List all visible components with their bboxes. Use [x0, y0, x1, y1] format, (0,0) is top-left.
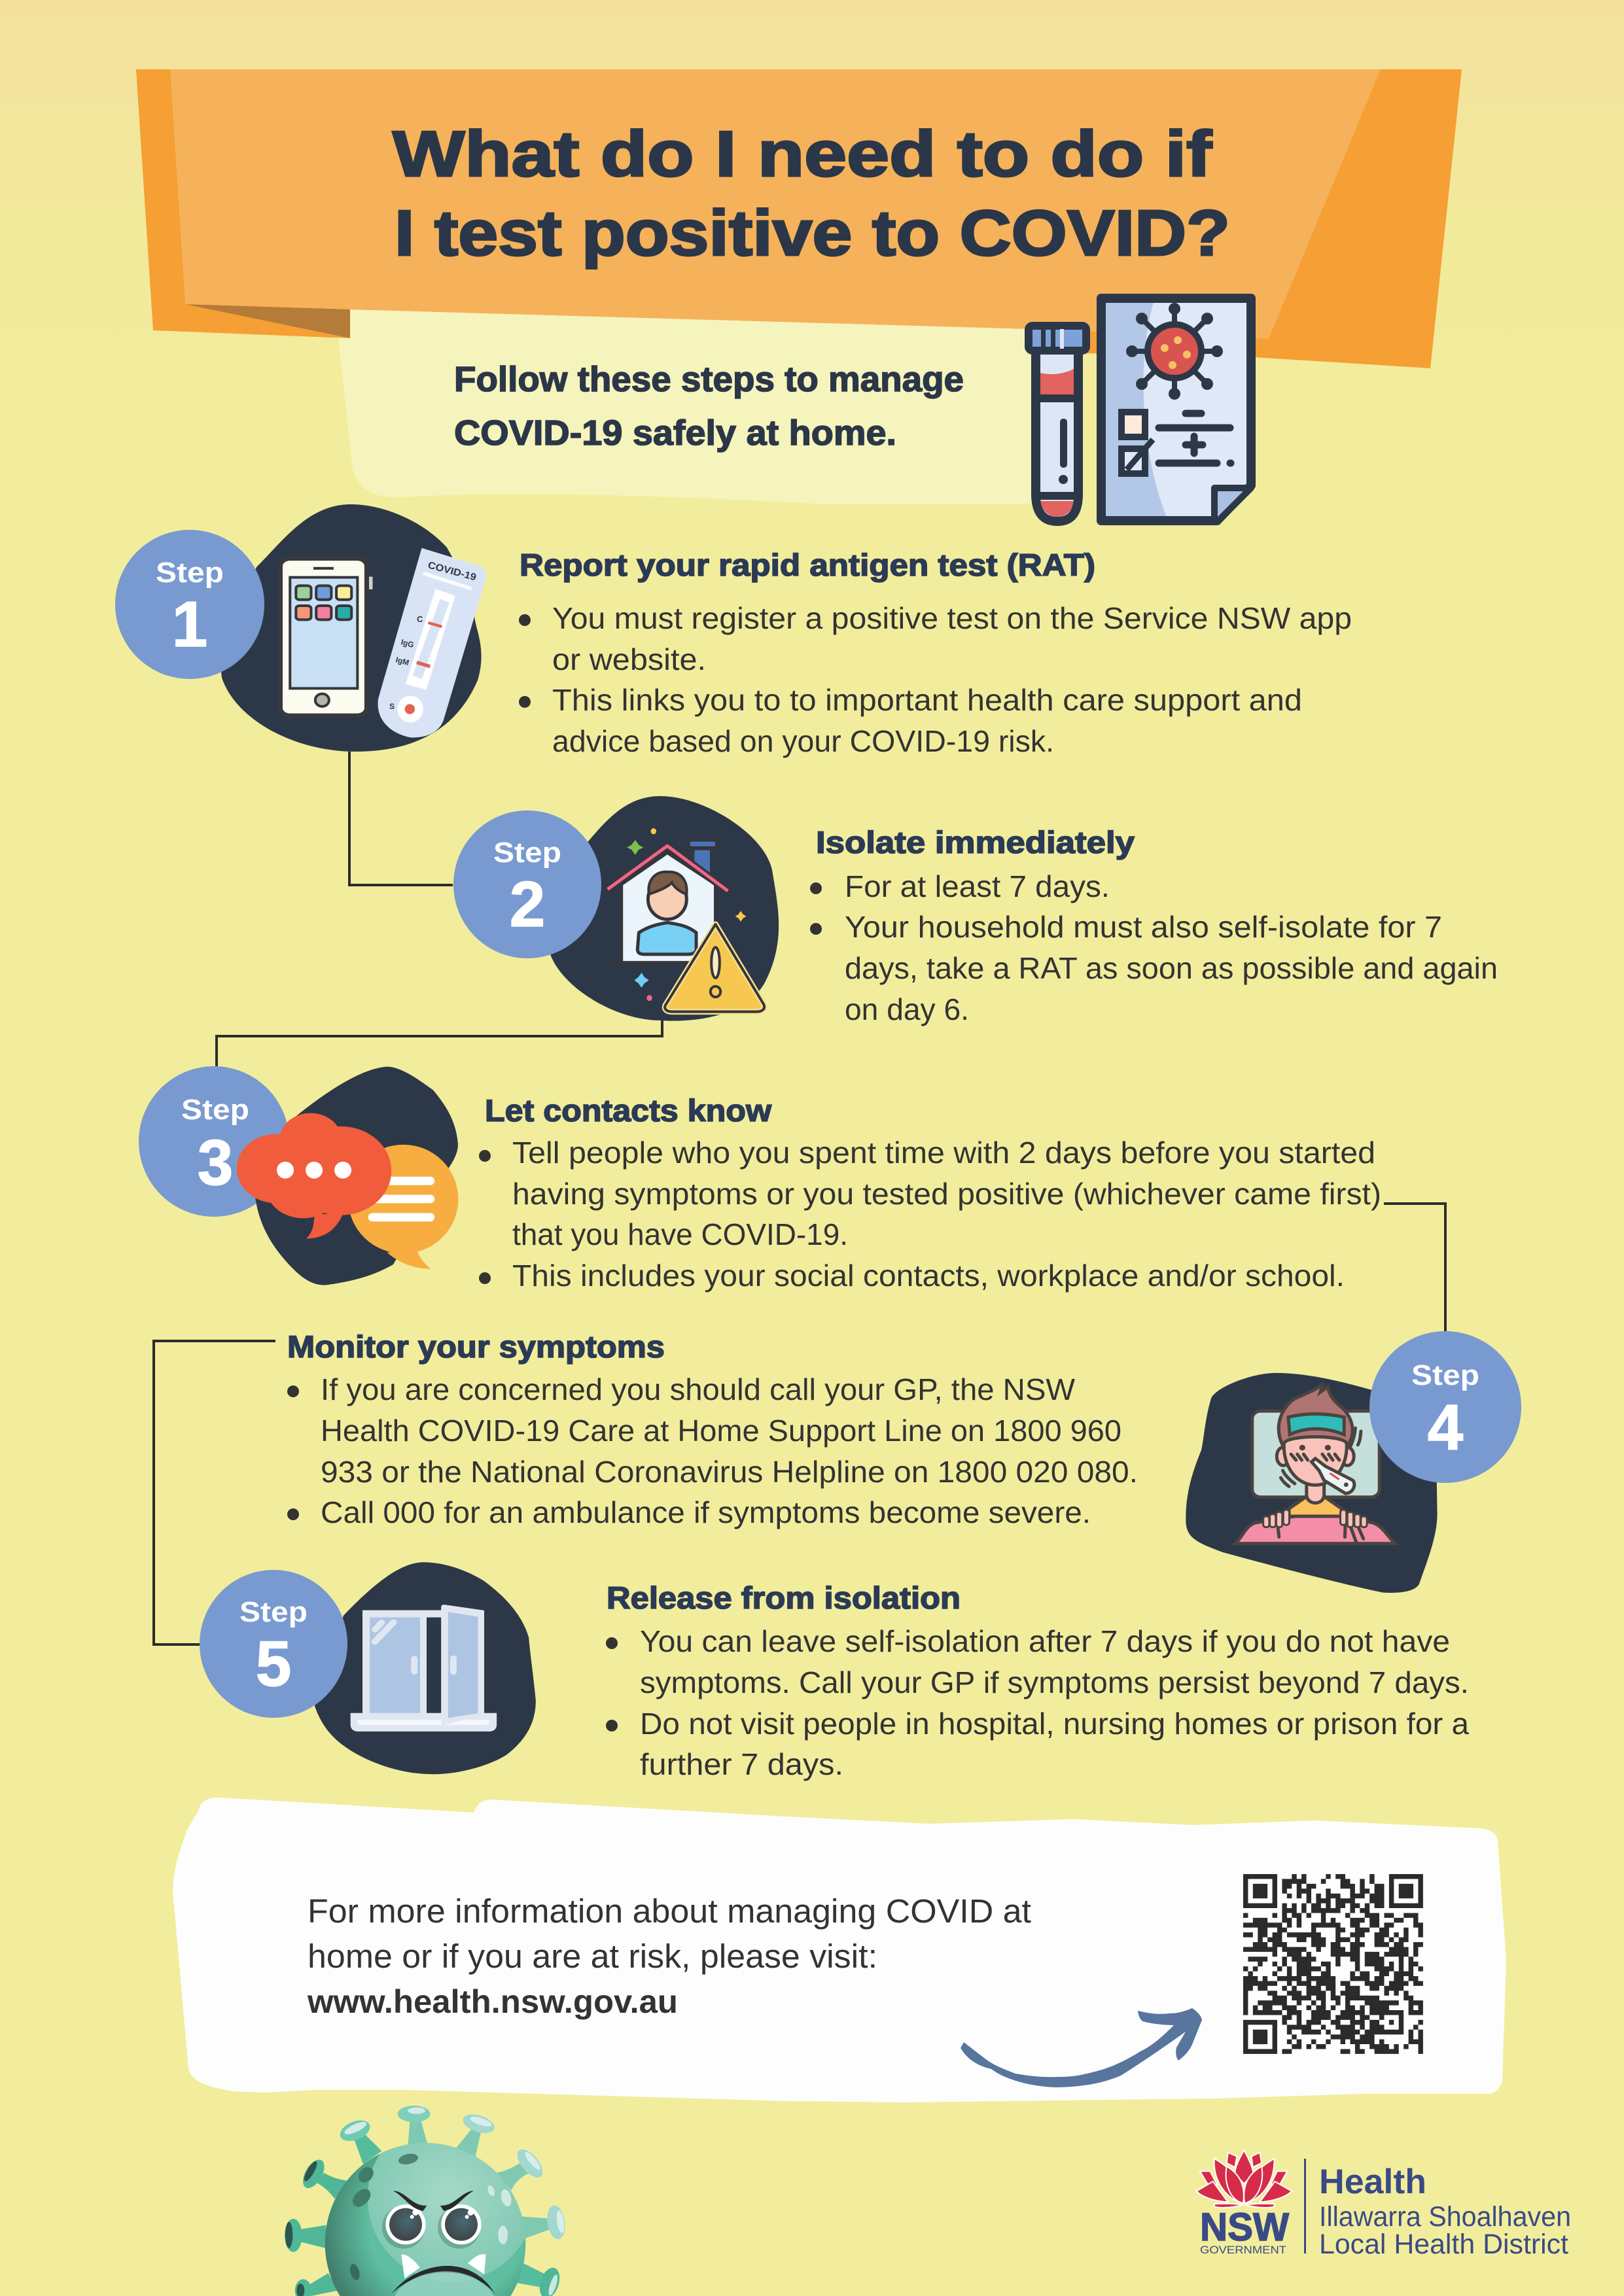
bullet list: symptoms. Call your GP if symptoms persist beyond 7 days.	[640, 1665, 1469, 1699]
panel: step 1	[115, 504, 1352, 758]
pale intro panel	[338, 309, 1073, 504]
logo: NSW Government Health Illawarra Shoalhaven Local Health District: Illawarra Shoalhaven	[1319, 2201, 1571, 2233]
panel: step 2	[453, 796, 1498, 1026]
icon: rapid antigen test cassette: COVID-19	[427, 559, 478, 583]
step badge: 5	[256, 1627, 291, 1699]
icon: test tube	[1029, 326, 1086, 521]
arrow to QR code	[961, 2008, 1202, 2087]
bullet list: on day 6.	[845, 992, 969, 1026]
step badge: 1	[172, 588, 207, 660]
connector: step 1 to step 2	[349, 752, 453, 885]
step badge: Step	[156, 557, 224, 589]
panel: step 4	[287, 1329, 1521, 1593]
panel: step 5	[200, 1562, 1469, 1781]
bullet list: You must register a positive test on the Service NSW app	[552, 601, 1352, 635]
QR code	[1243, 1877, 1423, 2051]
intro text	[454, 360, 964, 453]
bullet list	[810, 869, 1498, 1026]
step badge	[200, 1570, 347, 1718]
step badge: Step	[493, 837, 561, 869]
information text: For more information about managing COVID at	[308, 1892, 1031, 1930]
bullet list	[479, 1136, 1381, 1293]
logo: NSW Government Health Illawarra Shoalhaven Local Health District: Health	[1319, 2163, 1426, 2201]
icon: angry virus character	[285, 2106, 567, 2296]
bullet list: Call 000 for an ambulance if symptoms become severe.	[321, 1495, 1091, 1529]
connector: step 3 to step 4	[1384, 1204, 1445, 1331]
icon: phone	[279, 557, 372, 718]
step badge: 3	[198, 1126, 233, 1198]
logo: NSW Government Health Illawarra Shoalhaven Local Health District	[1196, 2150, 1571, 2260]
information text: home or if you are at risk, please visit:	[308, 1938, 877, 1975]
connector: step 2 to step 3	[217, 1019, 662, 1066]
heading: Let contacts know	[485, 1093, 771, 1128]
step badge: Step	[1411, 1359, 1479, 1391]
icon: person isolating at home	[608, 828, 764, 1012]
waratah emblem	[1196, 2150, 1292, 2208]
intro text: COVID-19 safely at home.	[454, 413, 896, 453]
icon: test report	[1101, 298, 1251, 521]
intro text: Follow these steps to manage	[454, 360, 964, 399]
heading: Report your rapid antigen test (RAT)	[520, 548, 1095, 582]
step badge: 2	[510, 868, 545, 940]
blob background	[546, 796, 779, 1021]
icon: sick person in bed	[1186, 1373, 1438, 1593]
bullet list	[606, 1624, 1469, 1781]
logo: NSW Government Health Illawarra Shoalhaven Local Health District: NSW	[1200, 2205, 1289, 2249]
step badge	[1369, 1331, 1521, 1483]
bullet list: 933 or the National Coronavirus Helpline on 1800 020 080.	[321, 1455, 1138, 1489]
icon: rapid antigen test cassette: S	[389, 702, 395, 711]
information text	[307, 1892, 1031, 2020]
heading: Release from isolation	[607, 1580, 961, 1615]
bullet list: This links you to to important health care support and	[552, 683, 1302, 717]
heading: Monitor your symptoms	[287, 1329, 665, 1364]
bullet list: further 7 days.	[640, 1747, 843, 1781]
bullet list: having symptoms or you tested positive (whichever came first)	[512, 1177, 1381, 1211]
bullet list: Your household must also self-isolate for 7	[845, 910, 1442, 944]
bullet list: Tell people who you spent time with 2 days before you started	[512, 1136, 1375, 1170]
step badge: Step	[239, 1596, 308, 1628]
logo: NSW Government Health Illawarra Shoalhaven Local Health District: GOVERNMENT	[1200, 2244, 1286, 2256]
step badge: 4	[1428, 1391, 1463, 1463]
spike stalks	[299, 2119, 550, 2296]
icon: open window on blob	[315, 1562, 536, 1774]
bullet list: days, take a RAT as soon as possible and again	[845, 951, 1498, 985]
step badge	[453, 810, 601, 958]
bullet list: or website.	[552, 642, 706, 676]
bullet list: Do not visit people in hospital, nursing homes or prison for a	[640, 1707, 1469, 1741]
bullet list: For at least 7 days.	[845, 869, 1110, 903]
connector: step 4 to step 5	[154, 1341, 275, 1644]
icon: rapid antigen test cassette: C	[417, 614, 423, 624]
step badge: Step	[181, 1094, 249, 1126]
information text: www.health.nsw.gov.au	[307, 1983, 678, 2020]
icon: rapid antigen test cassette: IgM	[395, 655, 410, 667]
icon: speech bubbles on blob	[237, 1067, 458, 1285]
bullet list: advice based on your COVID-19 risk.	[552, 724, 1054, 758]
bullet list: that you have COVID-19.	[512, 1217, 848, 1251]
logo: NSW Government Health Illawarra Shoalhaven Local Health District: Local Health District	[1319, 2229, 1568, 2260]
bullet list: This includes your social contacts, workplace and/or school.	[512, 1259, 1345, 1293]
title text: I test positive to COVID?	[395, 197, 1230, 269]
title text	[393, 118, 1230, 269]
icon: rapid antigen test cassette	[378, 548, 487, 738]
icon: rapid antigen test cassette: IgG	[400, 637, 415, 650]
heading: Isolate immediately	[816, 825, 1135, 860]
blob background	[221, 504, 482, 752]
bullet list: Health COVID-19 Care at Home Support Line on 1800 960	[321, 1414, 1121, 1448]
bullet list	[287, 1372, 1138, 1529]
bullet list: If you are concerned you should call your GP, the NSW	[321, 1372, 1076, 1406]
title text: What do I need to do if	[393, 118, 1212, 190]
panel: step 3	[139, 1066, 1381, 1293]
step badge	[139, 1066, 289, 1217]
title banner	[136, 69, 1462, 521]
bullet list: You can leave self-isolation after 7 days if you do not have	[640, 1624, 1450, 1658]
step badge	[115, 530, 264, 679]
panel: more information	[173, 1798, 1506, 2102]
bullet list	[519, 601, 1352, 758]
